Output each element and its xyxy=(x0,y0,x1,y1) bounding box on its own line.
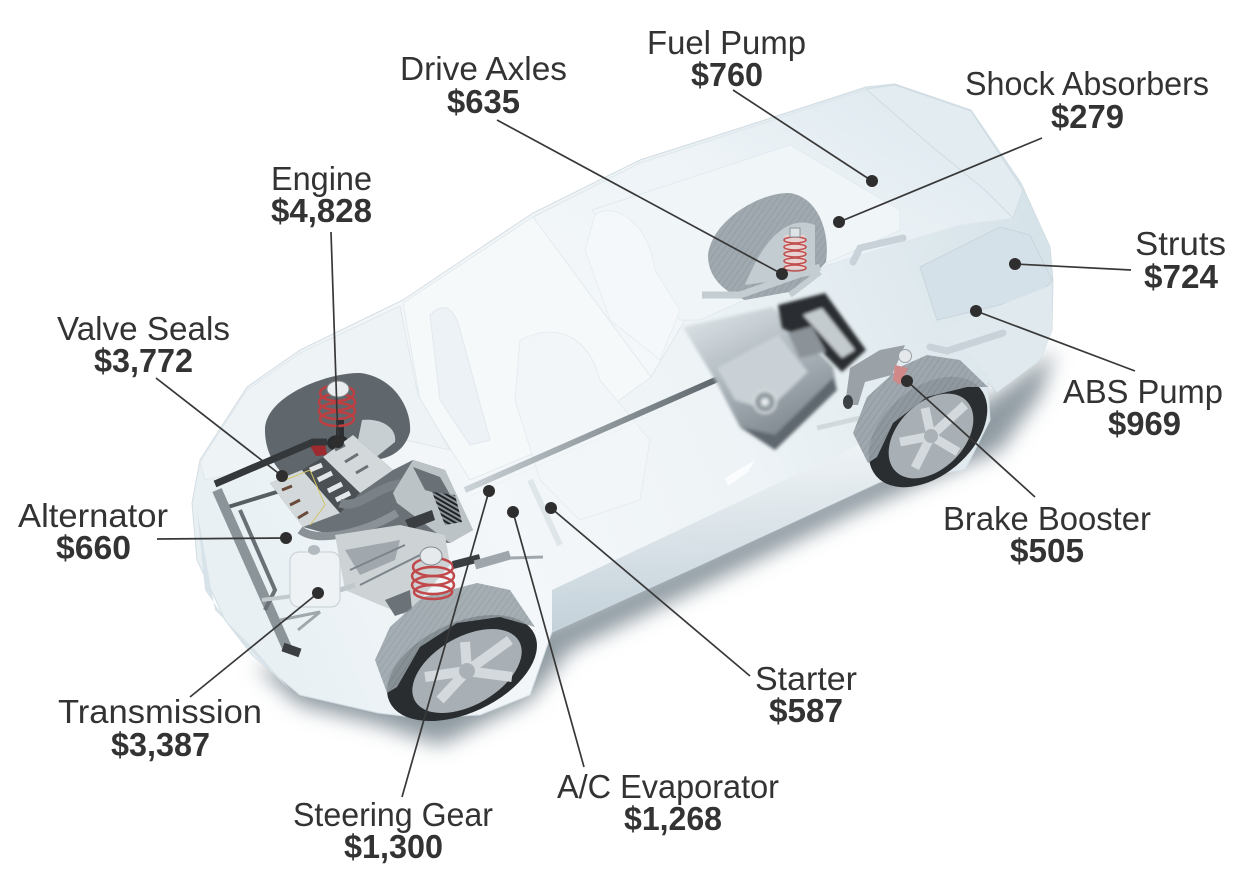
label: Valve Seals: $3,772 xyxy=(94,342,193,379)
leader dots xyxy=(276,175,1021,599)
transmission and gearbox xyxy=(290,525,450,616)
label: Engine xyxy=(271,160,372,229)
roof xyxy=(533,86,1023,377)
label: ABS Pump xyxy=(1063,373,1223,442)
label: Transmission: $3,387 xyxy=(111,726,210,763)
rear handle and exhaust xyxy=(853,238,1003,351)
front right spring xyxy=(412,547,454,599)
front control arm xyxy=(453,555,543,565)
label: Transmission: Transmission xyxy=(58,693,262,730)
label: Engine: $4,828 xyxy=(271,192,372,229)
rear left suspension arms xyxy=(702,267,820,295)
rear right arm xyxy=(817,345,905,428)
hood xyxy=(200,306,450,480)
label: Shock Absorbers: $279 xyxy=(1051,98,1124,135)
car body xyxy=(192,84,1053,718)
rear left spring xyxy=(784,228,806,271)
label: Fuel Pump xyxy=(647,24,806,93)
label: Alternator: $660 xyxy=(56,529,131,566)
seat shape: front xyxy=(430,308,490,445)
radiator frame xyxy=(215,442,340,653)
door handle xyxy=(725,460,755,486)
label: Fuel Pump: Fuel Pump xyxy=(647,24,806,61)
label: Drive Axles xyxy=(400,50,567,120)
fuel tank xyxy=(683,307,837,450)
label: Valve Seals: Valve Seals xyxy=(57,310,230,347)
front fascia xyxy=(197,510,290,690)
label: Struts xyxy=(1135,225,1226,295)
side sill xyxy=(552,435,885,632)
rear bumper panel xyxy=(925,285,1052,392)
car illustration xyxy=(192,84,1055,745)
engine xyxy=(270,435,473,543)
label: Struts: Struts xyxy=(1135,225,1226,262)
label: Alternator xyxy=(18,497,168,566)
label: Alternator: Alternator xyxy=(18,497,168,534)
front left wheel xyxy=(265,373,410,480)
label: Shock Absorbers xyxy=(965,65,1209,135)
label: Brake Booster xyxy=(943,500,1151,569)
label: A/C Evaporator xyxy=(557,768,779,837)
label: Brake Booster: Brake Booster xyxy=(943,500,1151,537)
rear differential xyxy=(778,293,866,372)
front right wheel xyxy=(370,583,554,743)
sunroof and seats outline xyxy=(592,145,900,320)
leader lines xyxy=(156,90,1135,797)
spoiler xyxy=(866,85,1023,218)
rear right spring xyxy=(893,350,912,385)
label: Engine: Engine xyxy=(271,160,372,197)
label: Steering Gear: $1,300 xyxy=(344,828,443,865)
label: Valve Seals xyxy=(57,310,230,379)
label: Starter: Starter xyxy=(755,660,857,697)
label: ABS Pump: $969 xyxy=(1108,405,1181,442)
label: Drive Axles: $635 xyxy=(447,83,520,120)
label: A/C Evaporator: A/C Evaporator xyxy=(557,768,779,805)
seat shapes: middle xyxy=(585,211,680,360)
label: Drive Axles: Drive Axles xyxy=(400,50,567,87)
label: Fuel Pump: $760 xyxy=(691,56,763,93)
label: Starter: $587 xyxy=(769,692,843,729)
label: Shock Absorbers: Shock Absorbers xyxy=(965,65,1209,102)
label: Starter xyxy=(755,660,857,729)
label: Struts: $724 xyxy=(1144,258,1219,295)
label: Brake Booster: $505 xyxy=(1010,532,1084,569)
label: A/C Evaporator: $1,268 xyxy=(624,800,722,837)
rear right wheel xyxy=(848,355,1008,509)
rear left wheel xyxy=(708,193,827,300)
label: Steering Gear xyxy=(293,796,493,865)
front left spring xyxy=(310,381,355,456)
label: ABS Pump: ABS Pump xyxy=(1063,373,1223,410)
ground shadow xyxy=(255,350,1055,745)
label: Steering Gear: Steering Gear xyxy=(293,796,493,833)
windshield and front seats xyxy=(403,217,651,480)
label: Transmission xyxy=(58,693,262,763)
rear cargo panel xyxy=(920,227,1052,320)
drive shaft xyxy=(465,378,720,545)
